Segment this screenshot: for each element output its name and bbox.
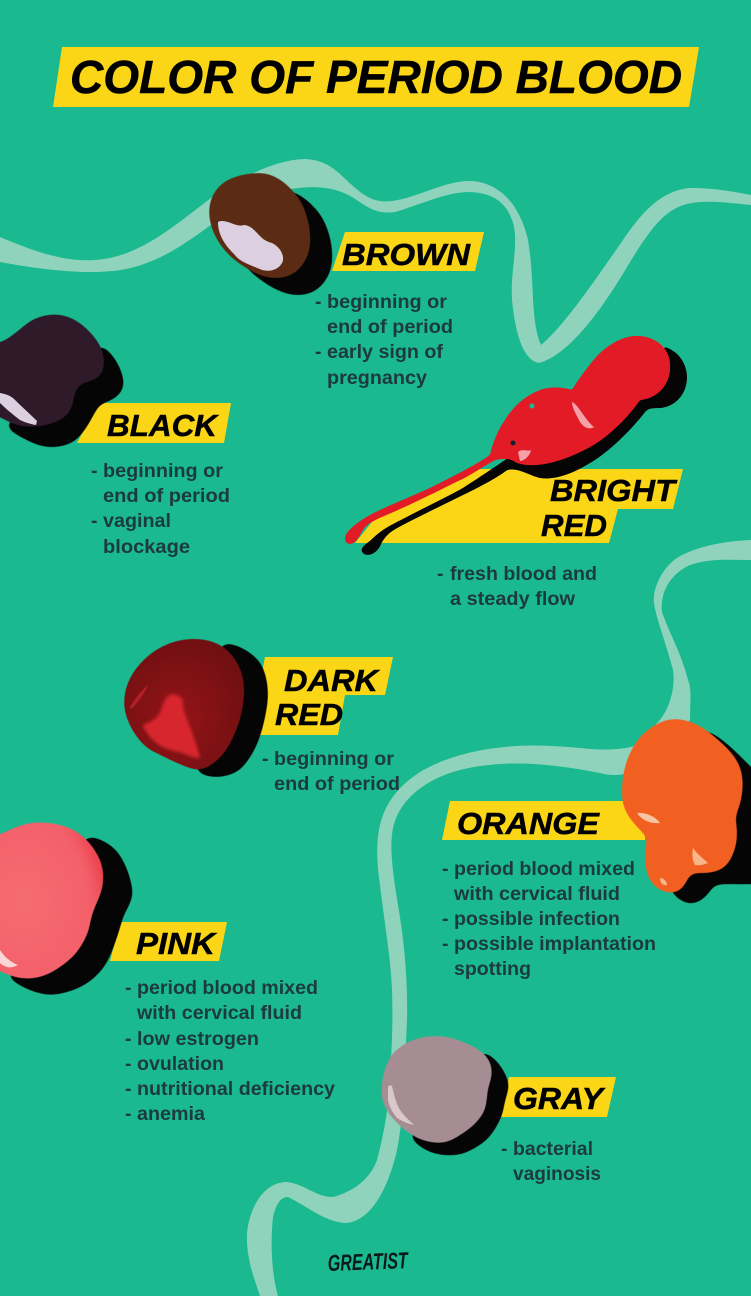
text: black causes: vaginal: [103, 510, 171, 532]
text: pink causes: -: [125, 977, 132, 999]
panel: gray: [381, 1036, 616, 1185]
panel: gray: GRAY: [513, 1081, 606, 1116]
text: black causes: -: [91, 460, 98, 482]
icon: bright red blob: [345, 336, 687, 555]
text: orange causes: -: [442, 858, 448, 880]
text: dark red causes: end of period: [274, 773, 400, 795]
text: brown causes: pregnancy: [327, 367, 427, 389]
text: gray causes: bacterial: [513, 1138, 593, 1160]
text: brown causes: [315, 291, 453, 389]
logo: Greatist: GREATIST: [327, 1247, 409, 1276]
text: pink causes: period blood mixed: [137, 977, 318, 999]
text: pink causes: [125, 977, 335, 1125]
text: brown causes: beginning or: [327, 291, 447, 313]
panel: black: BLACK: [107, 408, 220, 443]
text: pink causes: ovulation: [137, 1053, 224, 1075]
icon: orange blob: [622, 719, 751, 904]
panel: orange: ORANGE: [457, 806, 600, 841]
panel: bright red: RED: [541, 508, 607, 543]
title: COLOR OF PERIOD BLOOD: [70, 51, 682, 103]
text: bright red causes: fresh blood and: [450, 563, 597, 585]
panel: black: [0, 314, 231, 558]
text: dark red causes: beginning or: [274, 748, 394, 770]
text: pink causes: nutritional deficiency: [137, 1078, 335, 1100]
text: bright red causes: a steady flow: [450, 588, 576, 610]
text: orange causes: -: [442, 908, 448, 930]
text: brown causes: -: [315, 341, 322, 363]
text: orange causes: [442, 858, 656, 980]
ribbon: top flowing stream: [0, 159, 751, 363]
text: black causes: beginning or: [103, 460, 223, 482]
text: orange causes: with cervical fluid: [453, 883, 620, 905]
text: bright red causes: [437, 563, 597, 610]
text: pink causes: anemia: [137, 1103, 205, 1125]
text: gray causes: vaginosis: [513, 1163, 601, 1185]
text: brown causes: -: [315, 291, 322, 313]
panel: brown: [209, 173, 484, 389]
text: gray causes: -: [501, 1138, 508, 1160]
text: pink causes: -: [125, 1078, 132, 1100]
text: pink causes: with cervical fluid: [136, 1002, 302, 1024]
text: black causes: blockage: [103, 536, 190, 558]
panel: orange: [442, 719, 751, 980]
text: orange causes: possible implantation: [454, 933, 656, 955]
text: black causes: [91, 460, 230, 558]
panel: pink: [0, 822, 335, 1125]
text: pink causes: -: [125, 1103, 132, 1125]
text: gray causes: [501, 1138, 601, 1185]
text: dark red causes: [262, 748, 400, 795]
icon: gray blob: [381, 1036, 509, 1155]
text: pink causes: -: [125, 1053, 132, 1075]
text: black causes: end of period: [103, 485, 230, 507]
panel: bright red: BRIGHT: [550, 473, 678, 508]
text: orange causes: spotting: [454, 958, 531, 980]
panel: dark red: RED: [275, 697, 343, 732]
text: pink causes: low estrogen: [137, 1028, 259, 1050]
text: bright red causes: -: [437, 563, 444, 585]
text: orange causes: -: [442, 933, 448, 955]
text: orange causes: period blood mixed: [454, 858, 635, 880]
text: brown causes: early sign of: [327, 341, 444, 363]
panel: dark red: [124, 639, 400, 795]
panel: brown: BROWN: [342, 237, 471, 272]
panel: pink: PINK: [136, 926, 218, 961]
text: black causes: -: [91, 510, 98, 532]
icon: brown blob: [209, 173, 332, 295]
text: brown causes: end of period: [327, 316, 453, 338]
ribbon: right and bottom flowing stream: [247, 540, 751, 1296]
panel: bright red: [345, 336, 687, 610]
panel: dark red: DARK: [284, 663, 381, 698]
text: dark red causes: -: [262, 748, 268, 770]
icon: dark red blob: [124, 639, 268, 777]
text: orange causes: possible infection: [454, 908, 620, 930]
text: pink causes: -: [125, 1028, 132, 1050]
icon: pink blob: [0, 822, 133, 995]
icon: black blob: [0, 314, 124, 447]
